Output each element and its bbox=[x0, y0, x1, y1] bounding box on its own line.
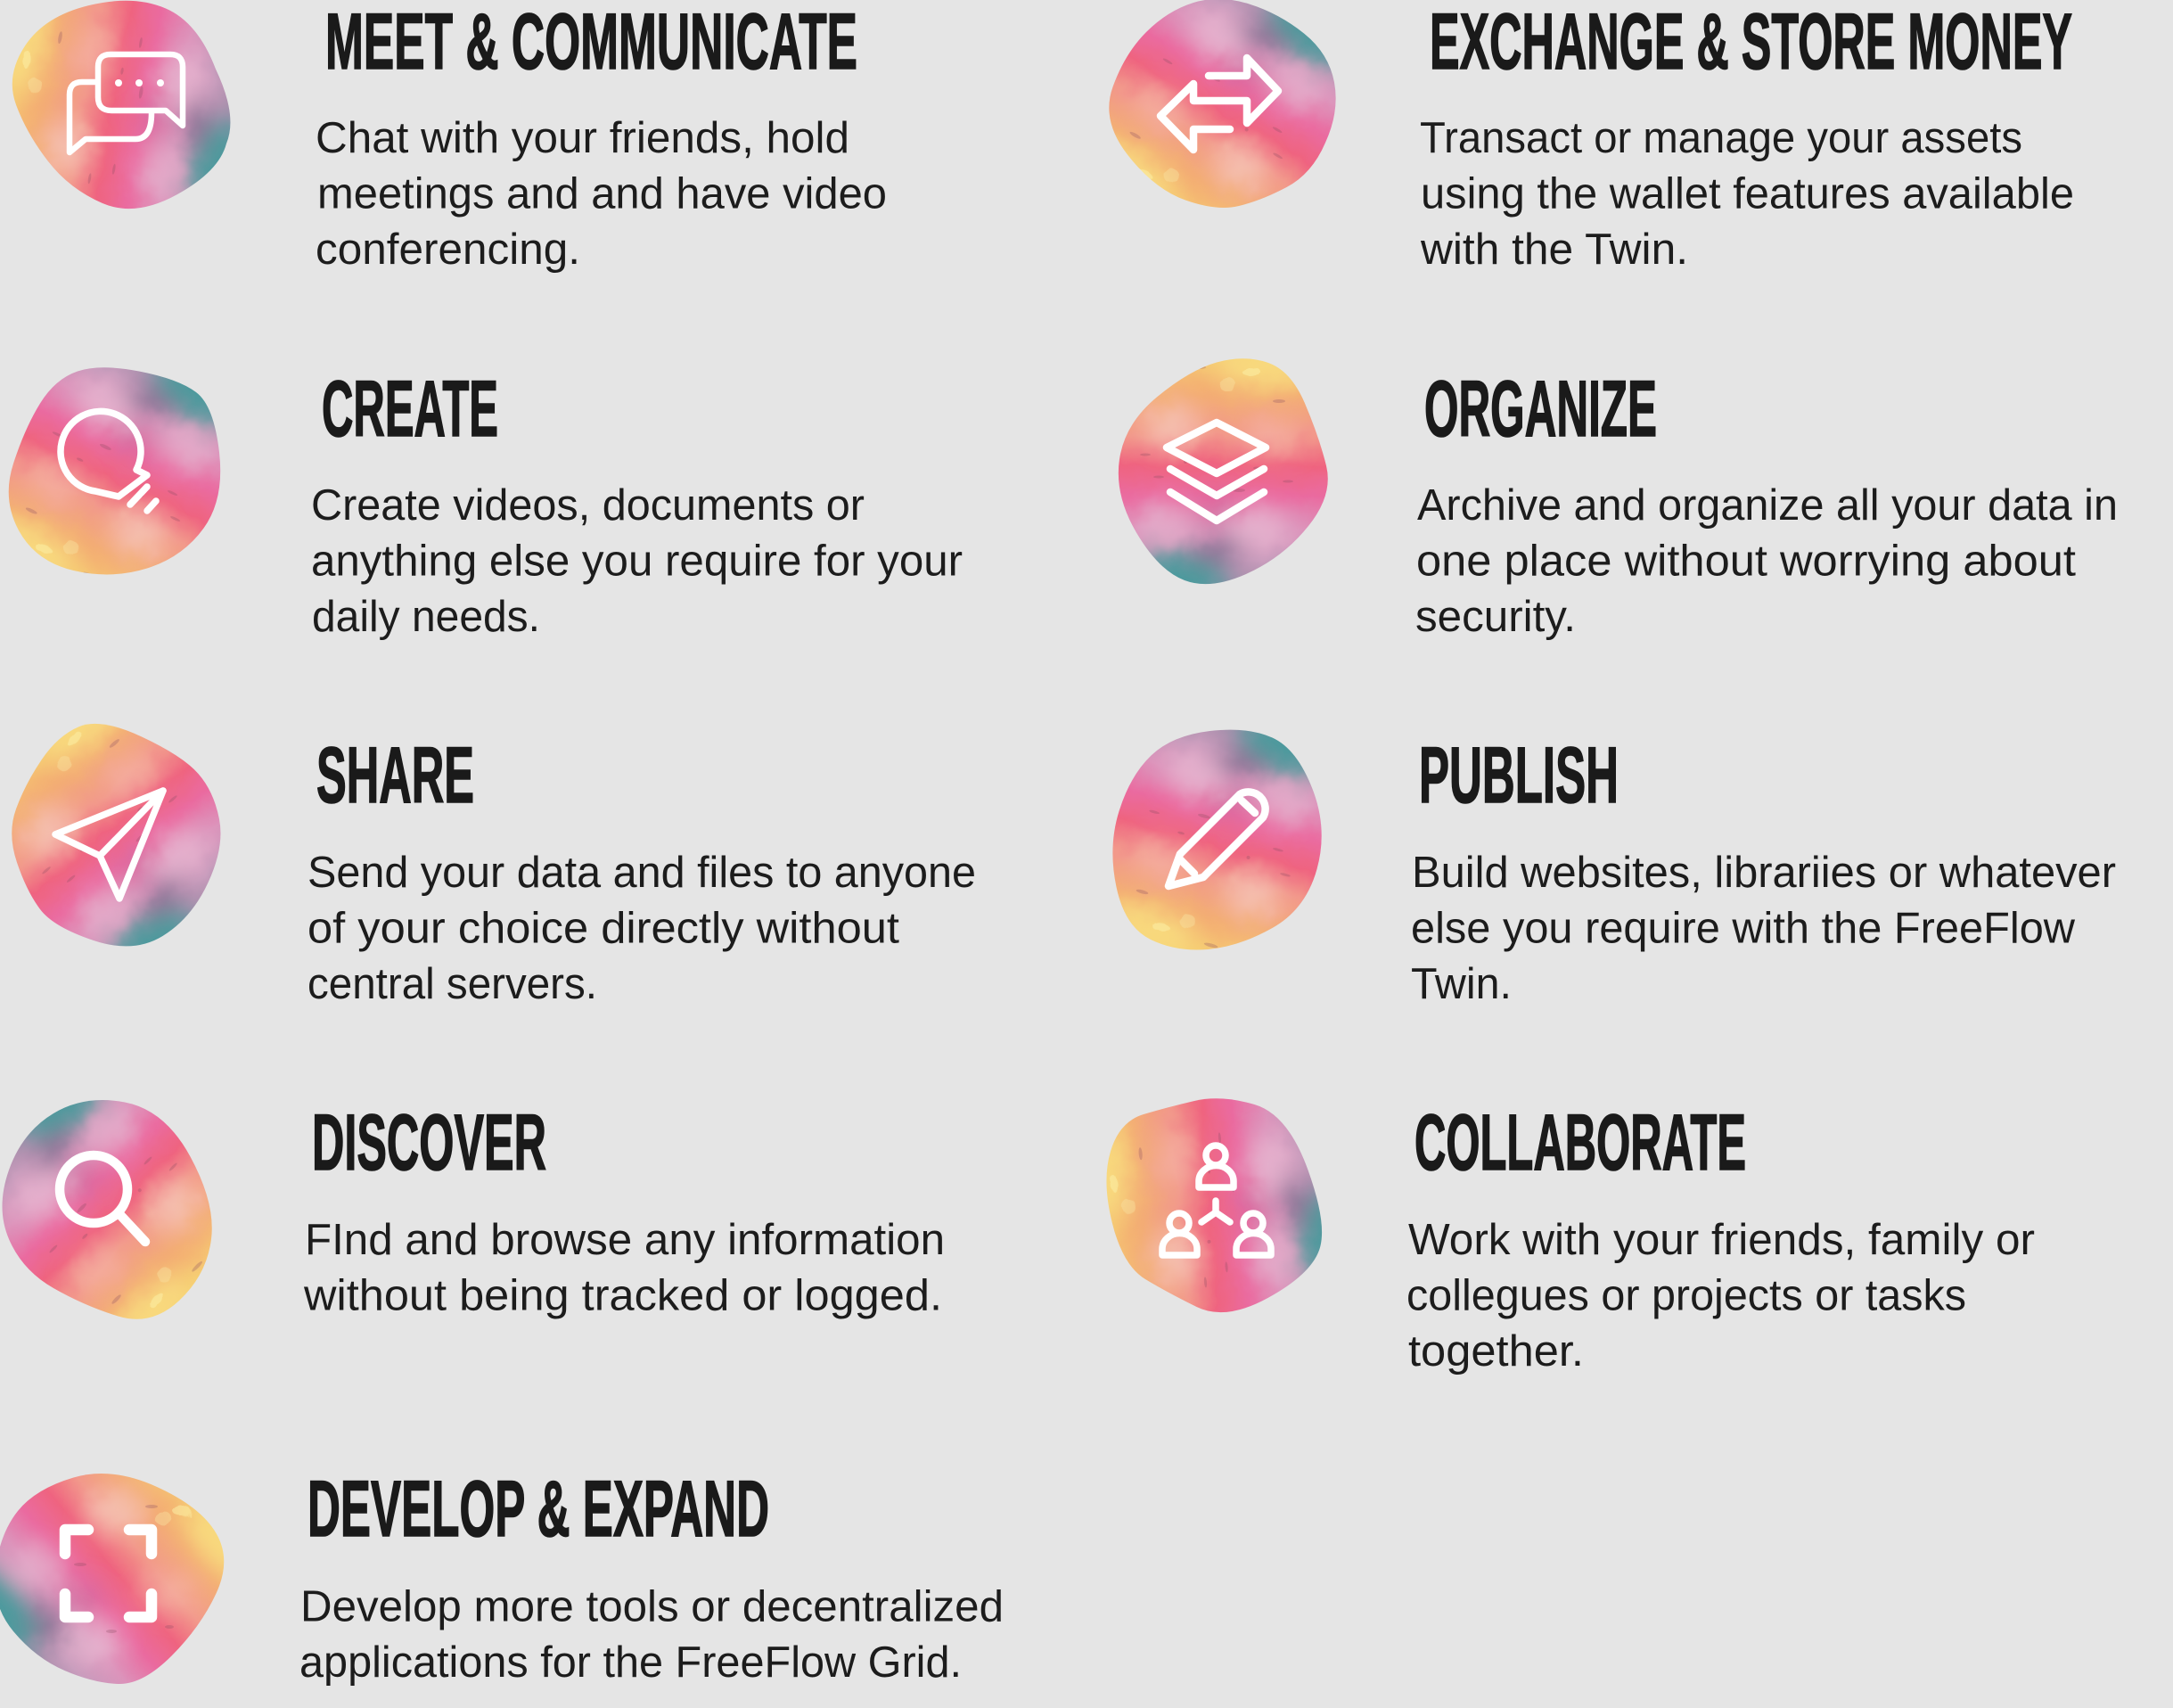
text: meet description: conferencing. bbox=[316, 226, 580, 274]
panel: discover bbox=[2, 1100, 942, 1319]
text: discover description: FInd and browse any information bbox=[305, 1216, 945, 1264]
icon: three connected people on watercolor blob bbox=[1106, 1098, 1323, 1312]
panel: organize bbox=[1118, 358, 2115, 640]
panel: share bbox=[12, 724, 974, 998]
icon: pencil on watercolor blob bbox=[1112, 729, 1322, 950]
text: collaborate description bbox=[1406, 1216, 2035, 1375]
text: create description: daily needs. bbox=[312, 593, 540, 641]
heading: organize: ORGANIZE bbox=[1424, 364, 1657, 453]
text: publish description: else you require with the FreeFlow bbox=[1411, 904, 2076, 952]
text: meet description bbox=[316, 114, 887, 274]
text: exchange description: using the wallet features available bbox=[1421, 169, 2074, 218]
icon: chat bubbles on watercolor blob bbox=[12, 0, 230, 209]
text: create description bbox=[311, 481, 963, 641]
text: share description: of your choice directly without bbox=[308, 904, 899, 952]
panel: collaborate bbox=[1106, 1098, 2034, 1375]
text: discover description: without being tracked or logged. bbox=[303, 1271, 942, 1319]
heading: collaborate: COLLABORATE bbox=[1414, 1097, 1746, 1187]
icon: magnifying glass on watercolor blob bbox=[2, 1100, 212, 1319]
text: develop description bbox=[299, 1583, 1004, 1687]
text: exchange description: with the Twin. bbox=[1420, 226, 1688, 274]
icon: exchange arrows on watercolor blob bbox=[1109, 0, 1336, 208]
icon: layers on watercolor blob bbox=[1118, 358, 1328, 585]
icon: expand corners on watercolor blob bbox=[0, 1474, 225, 1684]
text: create description: anything else you require for your bbox=[311, 537, 963, 585]
icon: create bubble on watercolor blob bbox=[9, 367, 221, 574]
text: organize description: Archive and organize all your data in bbox=[1417, 481, 2118, 530]
heading: share: SHARE bbox=[316, 730, 474, 819]
text: share description bbox=[308, 849, 976, 1008]
text: exchange description bbox=[1420, 114, 2074, 274]
panel: meet and communicate bbox=[12, 0, 885, 273]
text: publish description: Build websites, librariies or whatever bbox=[1412, 849, 2116, 897]
text: publish description bbox=[1411, 849, 2116, 1008]
text: collaborate description: together. bbox=[1408, 1327, 1584, 1375]
text: collaborate description: Work with your friends, family or bbox=[1408, 1216, 2035, 1264]
text: organize description: security. bbox=[1415, 593, 1576, 641]
text: meet description: Chat with your friends, hold bbox=[316, 114, 849, 162]
text: create description: Create videos, documents or bbox=[311, 481, 865, 530]
text: share description: central servers. bbox=[308, 960, 597, 1008]
text: exchange description: Transact or manage your assets bbox=[1420, 114, 2022, 162]
panel: exchange and store money bbox=[1109, 0, 2072, 264]
text: discover description bbox=[303, 1216, 945, 1319]
panel: publish bbox=[1112, 729, 2116, 998]
text: share description: Send your data and files to anyone bbox=[308, 849, 976, 897]
text: collaborate description: collegues or projects or tasks bbox=[1406, 1271, 1966, 1319]
heading: create: CREATE bbox=[322, 364, 498, 453]
heading: develop and expand: DEVELOP & EXPAND bbox=[308, 1464, 769, 1553]
panel: develop and expand bbox=[0, 1474, 1001, 1686]
text: develop description: Develop more tools or decentralized bbox=[300, 1583, 1004, 1631]
text: publish description: Twin. bbox=[1411, 960, 1512, 1008]
text: organize description: one place without worrying about bbox=[1416, 537, 2076, 585]
text: meet description: meetings and and have video bbox=[317, 169, 887, 218]
text: develop description: applications for the FreeFlow Grid. bbox=[299, 1638, 962, 1687]
text: organize description bbox=[1415, 481, 2118, 641]
heading: discover: DISCOVER bbox=[312, 1097, 546, 1187]
heading: publish: PUBLISH bbox=[1419, 730, 1619, 819]
panel: create bbox=[9, 367, 963, 640]
icon: paper plane on watercolor blob bbox=[12, 724, 221, 947]
